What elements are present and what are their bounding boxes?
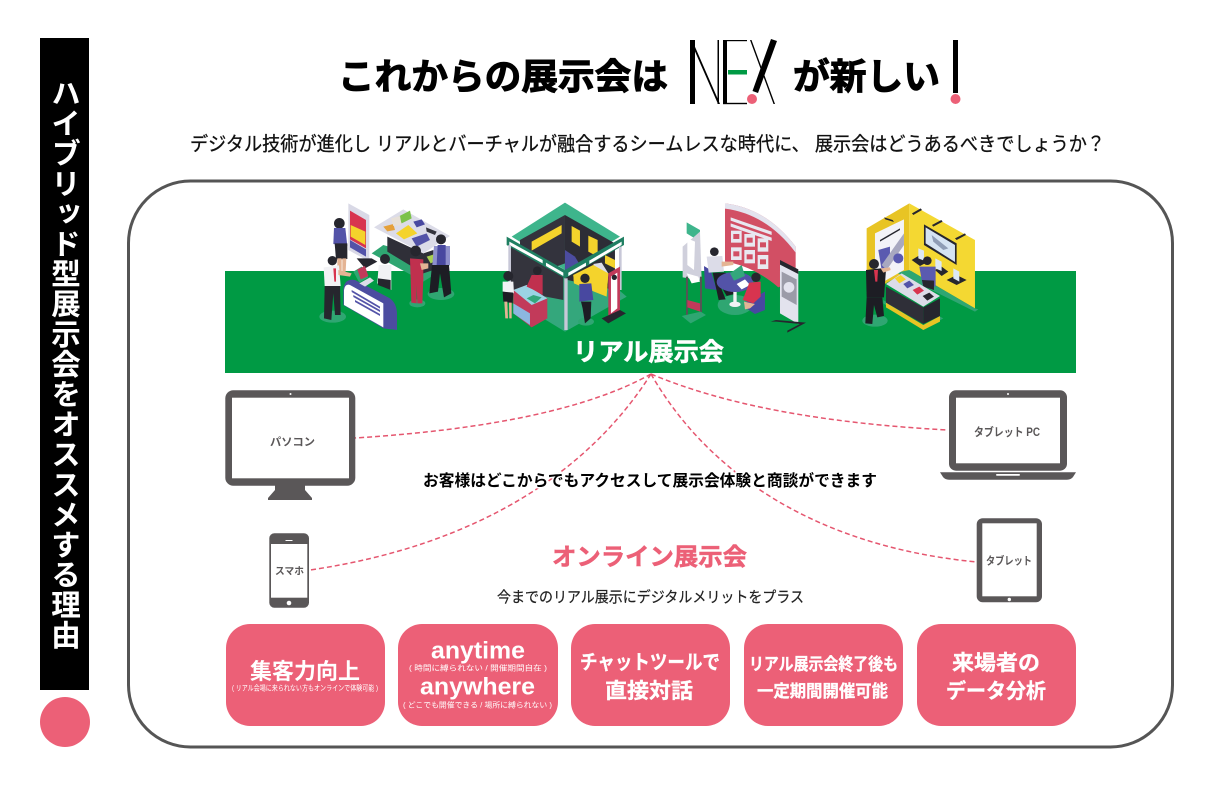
label: smartphone: スマホ — [275, 566, 304, 578]
anytime note: ( 時間に縛られない / 開催期間自在 ) — [409, 662, 548, 672]
icon: laptop tablet PC — [940, 390, 1076, 480]
online exhibition subheading: 今までのリアル展示にデジタルメリットをプラス — [497, 588, 804, 606]
icon: smartphone — [269, 533, 309, 608]
NEX logo — [690, 39, 777, 104]
illustration: meeting booth — [682, 203, 806, 333]
anytime: anytime — [431, 638, 525, 664]
card text line 2: 一定期間開催可能 — [757, 681, 888, 701]
card text line 2: データ分析 — [946, 679, 1046, 703]
subtitle: デジタル技術が進化し リアルとバーチャルが融合するシームレスな時代に、 展示会はどうあるべきでしょうか？ — [190, 134, 1105, 156]
title text right: が新しい — [793, 56, 940, 97]
label: tablet: タブレット — [986, 554, 1032, 568]
side banner — [40, 38, 89, 690]
green band: real exhibition — [225, 271, 1076, 373]
card text line 1: チャットツールで — [580, 652, 720, 674]
illustration: yellow booth — [862, 203, 978, 330]
access caption: お客様はどこからでもアクセスして展示会体験と商談ができます — [423, 471, 877, 490]
icon: desktop PC — [225, 390, 355, 500]
card: attract visitors — [226, 624, 385, 726]
anywhere note: ( どこでも開催できる / 場所に縛られない ) — [403, 700, 553, 710]
rounded frame panel — [128, 181, 1172, 747]
side banner text: ハイブリッド型展示会をオススメする理由 — [47, 78, 80, 650]
illustration: green booth — [503, 203, 627, 332]
card heading: 集客力向上 — [250, 659, 360, 684]
card text line 1: リアル展示会終了後も — [749, 654, 898, 674]
dashed connectors — [310, 374, 977, 570]
card note: ( リアル会場に来られない方もオンラインで体験可能 ) — [232, 682, 378, 692]
card: visitor data — [917, 624, 1076, 726]
card text line 1: 来場者の — [952, 652, 1040, 675]
online exhibition heading: オンライン展示会 — [552, 544, 747, 571]
illustration: exhibition desk scene — [319, 203, 454, 330]
icon: tablet — [977, 518, 1042, 602]
label: tablet PC: タブレット PC — [974, 425, 1040, 439]
title — [338, 39, 960, 104]
anywhere: anywhere — [420, 674, 535, 700]
title text left: これからの展示会は — [338, 56, 668, 97]
band label: リアル展示会 — [573, 338, 724, 366]
exclamation mark — [950, 40, 960, 104]
card text line 2: 直接対話 — [605, 680, 693, 703]
label: PC: パソコン — [270, 436, 315, 448]
side banner circle — [40, 697, 90, 747]
card: extended period — [744, 624, 903, 726]
card: chat tool — [571, 624, 730, 726]
card: anytime anywhere — [398, 624, 558, 726]
